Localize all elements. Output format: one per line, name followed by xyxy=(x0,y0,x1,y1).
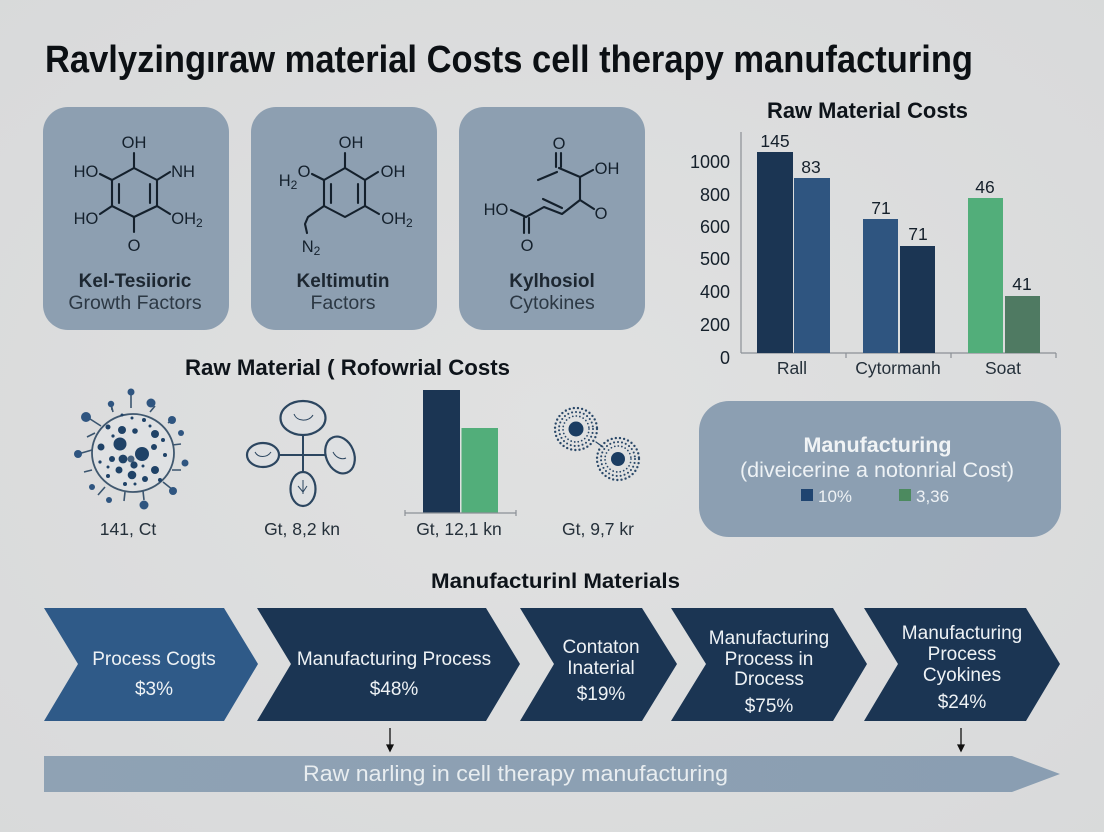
chevron: manufacturing process in drocess: Process in xyxy=(725,649,813,670)
icon: molecule two: O xyxy=(298,163,311,181)
panel: growth factors xyxy=(43,107,229,330)
chevron: manufacturing process cyokines xyxy=(864,608,1060,721)
icon labels: 141, Ct xyxy=(100,519,156,539)
icon: molecule three xyxy=(484,135,619,255)
icon: molecule three: OH xyxy=(595,160,619,178)
bar chart xyxy=(690,131,1056,378)
icon: molecule one: NH xyxy=(171,163,195,181)
label: factors: Factors xyxy=(310,292,376,314)
banner arrow: Raw narling in cell therapy manufacturing xyxy=(303,761,728,786)
label: growth factors: Kel-Tesiioric xyxy=(79,271,192,292)
label: cytokines: Cytokines xyxy=(509,292,595,314)
chevron: contaton material: Inaterial xyxy=(567,658,635,679)
bar chart: 800 xyxy=(700,185,730,205)
label: cytokines xyxy=(509,271,595,314)
chevron: manufacturing process cyokines: Process xyxy=(928,644,996,665)
chevron: manufacturing process in drocess: $75% xyxy=(745,696,793,717)
panel: manufacturing: (diveicerine a notonrial Cost) xyxy=(740,459,1014,482)
icon: dotted cells xyxy=(555,408,639,480)
icon: molecule three: O xyxy=(595,205,608,223)
chevron: manufacturing process xyxy=(257,608,520,721)
icon labels: Gt, 9,7 kr xyxy=(562,519,634,539)
icon labels: Gt, 12,1 kn xyxy=(416,519,502,539)
icon: molecule two: 2 xyxy=(314,244,321,258)
icon: virus cell xyxy=(74,388,188,510)
bar chart: Rall xyxy=(777,358,807,378)
panel: cytokines xyxy=(459,107,645,330)
bar chart: 600 xyxy=(700,217,730,237)
icon: molecule three: O xyxy=(521,237,534,255)
label: growth factors: Growth Factors xyxy=(68,292,202,314)
icon: molecule two xyxy=(279,134,413,258)
chevron: manufacturing process in drocess xyxy=(671,608,867,721)
legend: 3,36 xyxy=(916,487,949,506)
icon: molecule one: HO xyxy=(74,163,99,181)
bar chart: 145 xyxy=(760,131,790,151)
heading: raw material costs chart: Raw Material Costs xyxy=(767,98,968,123)
bar chart: 500 xyxy=(700,249,730,269)
chevron: manufacturing process in drocess: Drocess xyxy=(734,669,804,690)
bar chart: Soat xyxy=(985,358,1021,378)
panel: manufacturing: Manufacturing xyxy=(803,433,952,457)
icon: molecule one xyxy=(74,134,203,255)
icon: molecule two: H xyxy=(279,172,291,190)
panel: factors xyxy=(251,107,437,330)
bar chart: 200 xyxy=(700,315,730,335)
chevron: process costs xyxy=(44,608,258,721)
label: cytokines: Kylhosiol xyxy=(509,271,595,292)
icon labels: Gt, 8,2 kn xyxy=(264,519,340,539)
icon: molecule one: 2 xyxy=(196,216,203,230)
icon: molecule one: OH xyxy=(122,134,146,152)
icon labels xyxy=(100,519,634,539)
bar chart: Cytormanh xyxy=(855,358,941,378)
label: growth factors xyxy=(68,271,202,314)
legend xyxy=(801,487,949,506)
arrow: down right xyxy=(958,728,964,751)
icon: molecule two: 2 xyxy=(291,178,298,192)
bar chart: 41 xyxy=(1012,274,1032,294)
chevron: contaton material: $19% xyxy=(577,684,625,705)
chevron: manufacturing process: Manufacturing Process xyxy=(297,649,491,670)
banner arrow xyxy=(44,756,1060,792)
title: Ravlyzingıraw material Costs cell therapy manufacturing xyxy=(45,39,973,81)
arrow: down left xyxy=(387,728,393,751)
bar chart: 46 xyxy=(975,177,995,197)
chevron: process costs: Process Cogts xyxy=(92,649,216,670)
chevron: manufacturing process: $48% xyxy=(370,679,418,700)
icon: molecule two: OH xyxy=(381,163,405,181)
bar chart: 400 xyxy=(700,282,730,302)
icon: molecule two: OH xyxy=(381,210,406,228)
icon: molecule two: N xyxy=(302,238,314,256)
label: factors xyxy=(297,271,389,314)
legend: 10% xyxy=(818,487,852,506)
icon: linked cells xyxy=(247,401,360,506)
chevron: manufacturing process cyokines: Cyokines xyxy=(923,665,1001,686)
icon: molecule three: HO xyxy=(484,201,509,219)
bar chart: 71 xyxy=(871,198,891,218)
icon: molecule one: O xyxy=(128,237,141,255)
chevron: contaton material: Contaton xyxy=(562,637,640,658)
bar chart: 1000 xyxy=(690,152,730,172)
bar chart: 0 xyxy=(720,348,730,368)
chevron: manufacturing process in drocess: Manufacturing xyxy=(709,628,829,649)
heading: material costs: Raw Material ( Rofowrial Costs xyxy=(185,355,510,380)
chevron: process costs: $3% xyxy=(135,679,173,700)
icon: molecule one: HO xyxy=(74,210,99,228)
icon: molecule two: OH xyxy=(339,134,363,152)
heading: manufacturing materials: Manufacturinl Materials xyxy=(431,569,680,593)
icon: molecule three: O xyxy=(553,135,566,153)
icon: molecule two: 2 xyxy=(406,216,413,230)
icon: molecule one: OH xyxy=(171,210,196,228)
bar chart: 83 xyxy=(801,157,821,177)
chevron: contaton material xyxy=(520,608,677,721)
panel: manufacturing xyxy=(699,401,1061,537)
label: factors: Keltimutin xyxy=(297,271,389,292)
chevron: manufacturing process cyokines: Manufacturing xyxy=(902,623,1022,644)
icon: mini bars xyxy=(405,390,516,516)
chevron: manufacturing process cyokines: $24% xyxy=(938,692,986,713)
bar chart: 71 xyxy=(908,224,928,244)
